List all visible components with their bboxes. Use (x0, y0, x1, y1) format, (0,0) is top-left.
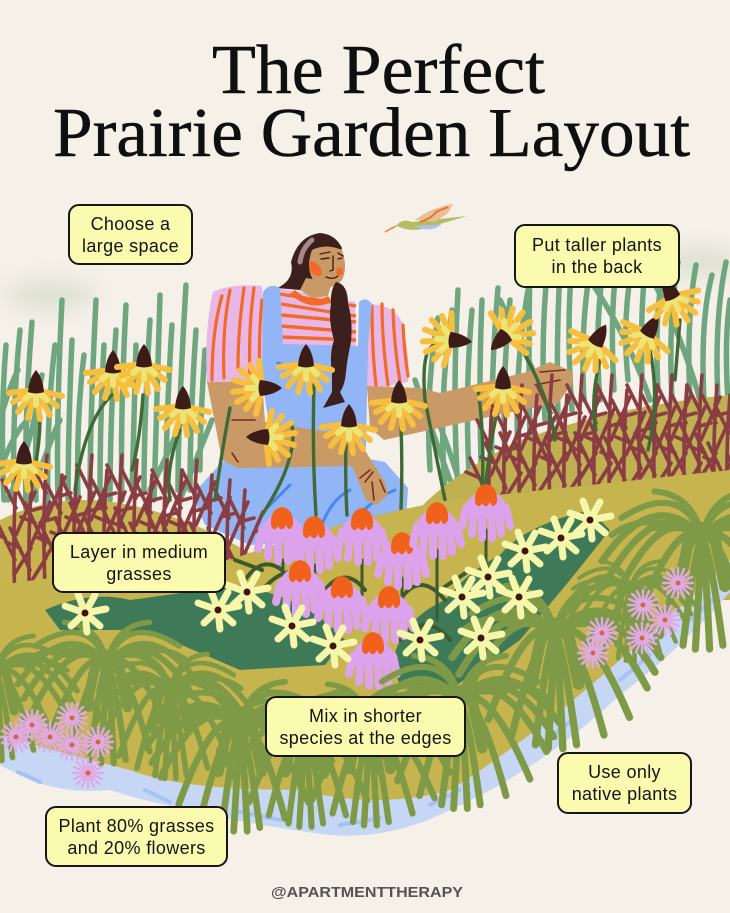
pink coneflowers (258, 484, 510, 686)
callout: put taller plants in the back: Put taller plants (532, 235, 662, 255)
callout: mix in shorter species (265, 696, 466, 757)
callout: use only native plants: native plants (572, 784, 677, 804)
callout: choose a large space: Choose a (91, 214, 170, 234)
callout: plant 80% grasses and 20% flowers: Plant 80% grasses (58, 816, 215, 836)
ground: back left mound (0, 500, 280, 640)
face lines (320, 252, 343, 278)
sleeve stripes (212, 288, 408, 385)
flower stems (30, 320, 680, 530)
callout: use only native plants (557, 752, 692, 814)
title (53, 32, 691, 172)
dark fronds under pink flowers (235, 560, 470, 640)
callout: put taller plants in the back (514, 224, 680, 288)
pink asters left (1, 703, 113, 788)
olive grass clumps (0, 491, 730, 831)
shirt (278, 288, 356, 346)
water strokes (18, 600, 712, 825)
callout: plant 80% grasses and 20% flowers: and 20% flowers (67, 838, 206, 858)
cheeks (309, 260, 343, 276)
neck (300, 278, 332, 298)
title: The Perfect (212, 32, 546, 109)
callout: layer in medium grasses: Layer in medium (70, 542, 208, 562)
left sleeve (206, 285, 268, 383)
hair back (277, 233, 342, 290)
hand lines (232, 370, 565, 500)
title: Prairie Garden Layout (53, 95, 691, 172)
pink asters right (578, 568, 693, 668)
tall grasses right (415, 262, 730, 490)
callout: mix in shorter species: species at the edges (279, 728, 452, 748)
right sleeve (366, 304, 408, 390)
pale yellow daisies (65, 501, 611, 665)
skirt (192, 452, 408, 545)
earth (0, 470, 730, 800)
callout: use only native plants: Use only (588, 762, 661, 782)
bird (385, 204, 467, 232)
right arm (367, 362, 573, 440)
ground: front yellow earth over water (0, 470, 730, 836)
callout: mix in shorter species: Mix in shorter (309, 706, 422, 726)
yellow flowers (0, 267, 708, 490)
skirt strokes (265, 363, 395, 530)
water (0, 530, 730, 836)
hair highlight (300, 240, 312, 262)
callout: put taller plants in the back: in the back (552, 257, 642, 277)
collar (290, 290, 332, 306)
shirt stripes (280, 294, 356, 340)
face (309, 246, 345, 288)
woman (192, 233, 573, 545)
tall grasses left (0, 285, 212, 510)
callout: layer in medium grasses: grasses (106, 564, 172, 584)
callout: choose a large space: large space (82, 236, 179, 256)
red stems left (0, 455, 269, 620)
callout: layer in medium grasses (52, 532, 226, 593)
callout: plant 80% grasses and 20% flowers (45, 806, 228, 867)
haze behind grasses (5, 248, 730, 309)
ground: back right mound (410, 395, 730, 600)
red stems right (466, 375, 730, 540)
footer handle: @APARTMENTTHERAPY (271, 885, 463, 901)
left arm (207, 382, 388, 505)
callout: choose a large space (68, 204, 193, 265)
dark green plant mounds (45, 510, 610, 690)
overalls (262, 286, 372, 462)
braid (323, 282, 352, 408)
